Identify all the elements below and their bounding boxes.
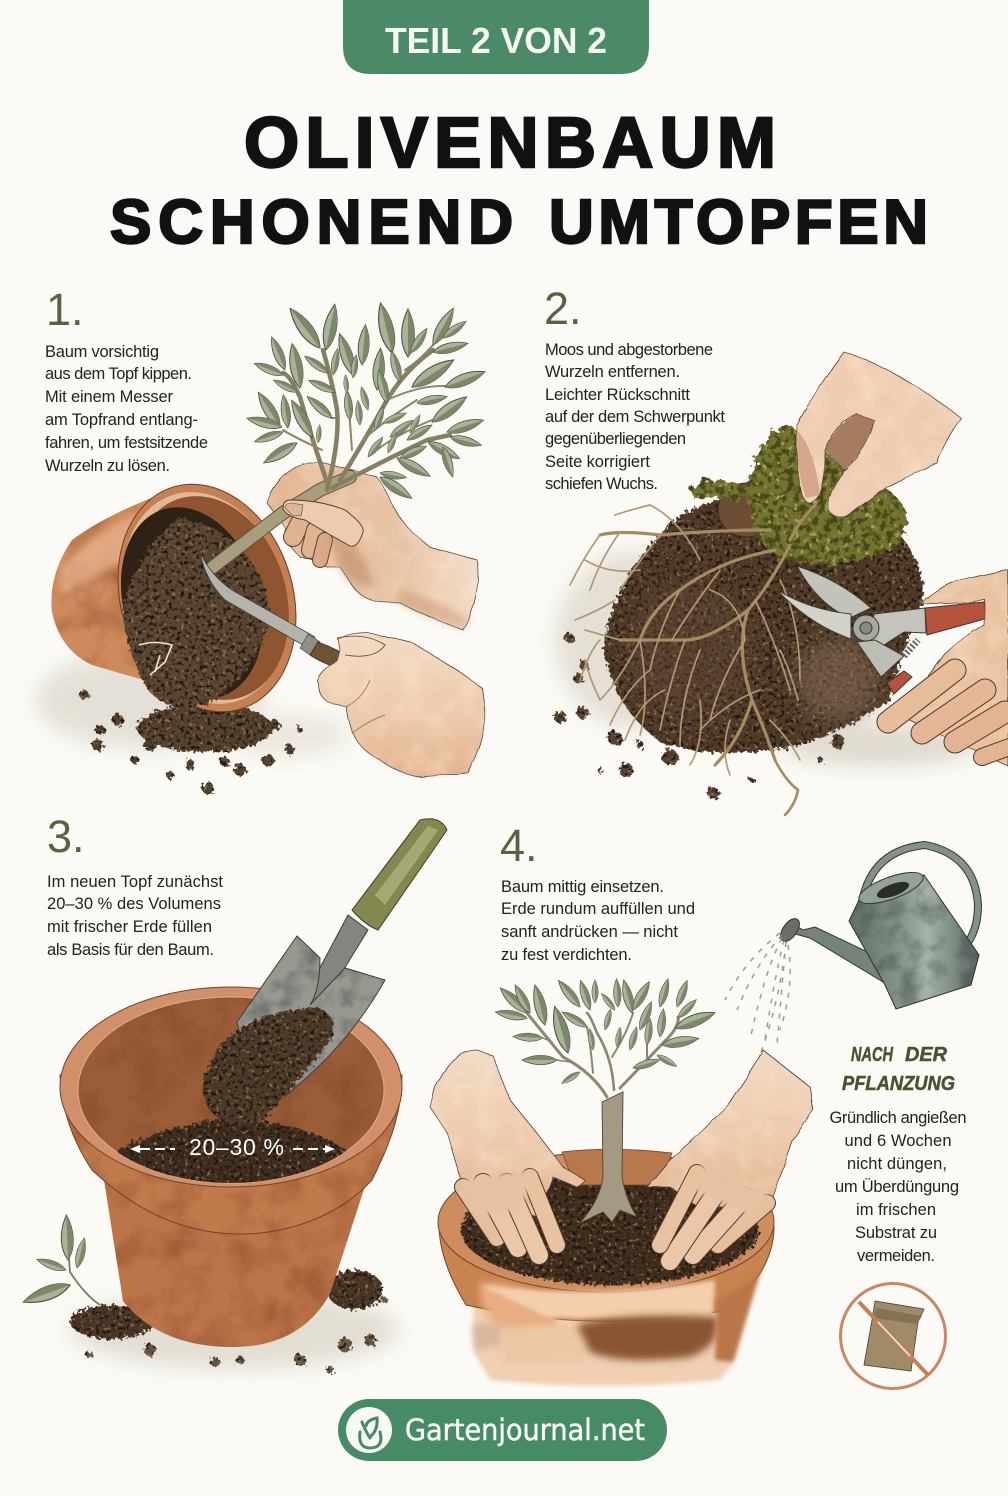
note text: im frischen xyxy=(856,1201,936,1219)
step 3 text: Im neuen Topf zunächst xyxy=(47,873,223,891)
soil mound xyxy=(604,497,923,753)
icon: plant logo xyxy=(346,1407,392,1453)
note text: vermeiden. xyxy=(857,1247,935,1265)
step 1 number: 1. xyxy=(46,284,84,335)
step 4 number: 4. xyxy=(500,820,538,871)
step 2 text: Seite korrigiert xyxy=(545,453,650,471)
step 3 text: mit frischer Erde füllen xyxy=(47,918,212,936)
right hand pressing soil xyxy=(647,1050,813,1261)
note heading: DER xyxy=(905,1044,948,1066)
moss xyxy=(690,425,908,564)
panel: step 2 xyxy=(544,283,1008,815)
note heading xyxy=(842,1044,955,1095)
step 1 text: Wurzeln zu lösen. xyxy=(45,457,170,475)
step 1 text: aus dem Topf kippen. xyxy=(45,365,192,383)
step 2 text: auf der dem Schwerpunkt xyxy=(545,408,725,426)
ground shadow and soil xyxy=(70,1270,400,1374)
clod xyxy=(718,483,776,537)
terracotta pot with soil xyxy=(438,1149,774,1386)
ground shadow and spilled soil xyxy=(35,650,350,794)
step 1 text: Baum vorsichtig xyxy=(45,343,159,361)
step 4 text: zu fest verdichten. xyxy=(501,946,632,964)
pale root xyxy=(139,642,172,675)
title xyxy=(110,104,928,257)
step 1 text: Mit einem Messer xyxy=(45,388,174,406)
fill level label: 20–30 % xyxy=(189,1134,284,1160)
panel: step 1 xyxy=(35,284,487,794)
icon: no fertilizer xyxy=(840,1284,946,1388)
title: UMTOPFEN xyxy=(549,188,928,257)
step 2 text: schiefen Wuchs. xyxy=(545,475,658,493)
part badge: TEIL 2 VON 2 xyxy=(385,20,607,61)
watering can xyxy=(777,845,979,1009)
young olive tree xyxy=(495,978,717,1223)
step 2 text: Leichter Rückschnitt xyxy=(545,386,690,404)
water spray xyxy=(725,933,790,1055)
soil on trowel xyxy=(203,1008,333,1125)
step 3 text: als Basis für den Baum. xyxy=(47,941,214,959)
knife xyxy=(200,552,363,672)
step 4 text: Erde rundum auffüllen und xyxy=(501,900,695,918)
step 1 text xyxy=(45,343,208,475)
note text: Substrat zu xyxy=(855,1224,937,1242)
hand shading xyxy=(330,530,470,628)
root ball xyxy=(123,518,269,708)
title: SCHONEND xyxy=(110,188,513,257)
panel: step 4 xyxy=(430,820,979,1388)
note text: um Überdüngung xyxy=(835,1178,959,1196)
step 1 text: fahren, um festsitzende xyxy=(45,434,208,452)
note heading: PFLANZUNG xyxy=(842,1073,955,1095)
step 2 text: Wurzeln entfernen. xyxy=(545,363,680,381)
footer logo pill xyxy=(338,1399,667,1461)
upper hand plucking moss xyxy=(797,352,961,518)
soil highlights xyxy=(625,585,880,722)
step 2 text: gegenüberliegenden xyxy=(545,430,686,448)
roots xyxy=(570,505,815,815)
step 4 text: Baum mittig einsetzen. xyxy=(501,878,664,896)
title: OLIVENBAUM xyxy=(244,104,776,183)
olive leaves xyxy=(246,302,487,503)
step 1 text: am Topfrand entlang- xyxy=(45,411,198,429)
step 3 text: 20–30 % des Volumens xyxy=(47,895,221,913)
lower hand holding shears xyxy=(888,570,1008,766)
step 2 text xyxy=(545,341,725,493)
garden shears xyxy=(777,566,988,694)
step 2 number: 2. xyxy=(544,283,582,334)
step 3 text xyxy=(47,873,223,959)
lower hand holding knife xyxy=(317,632,485,777)
olive sprig xyxy=(21,1215,100,1308)
upper hand palm xyxy=(267,462,478,630)
note: after planting xyxy=(830,1044,966,1265)
note heading: NACH xyxy=(851,1044,893,1066)
note text: Gründlich angießen xyxy=(830,1109,966,1127)
panel: step 3 xyxy=(21,811,447,1374)
part badge xyxy=(343,0,649,74)
step 4 text xyxy=(501,878,695,964)
note text: nicht düngen, xyxy=(847,1155,947,1173)
step 3 number: 3. xyxy=(47,811,85,862)
terracotta pot xyxy=(60,987,402,1347)
fill level label xyxy=(130,1134,335,1160)
note text: und 6 Wochen xyxy=(844,1132,952,1150)
note text xyxy=(830,1109,966,1265)
soil inside pot xyxy=(118,1118,347,1183)
left hand pressing soil xyxy=(430,1050,585,1255)
thumb xyxy=(283,500,363,546)
trowel xyxy=(237,819,447,1114)
step 2 text: Moos und abgestorbene xyxy=(545,341,713,359)
stem and branches xyxy=(213,345,450,567)
lower fingers xyxy=(293,523,325,560)
ground shadow and crumbs xyxy=(554,550,980,799)
footer logo pill: Gartenjournal.net xyxy=(405,1413,645,1447)
tilted terracotta pot xyxy=(51,462,323,734)
step 4 text: sanft andrücken — nicht xyxy=(501,923,678,941)
